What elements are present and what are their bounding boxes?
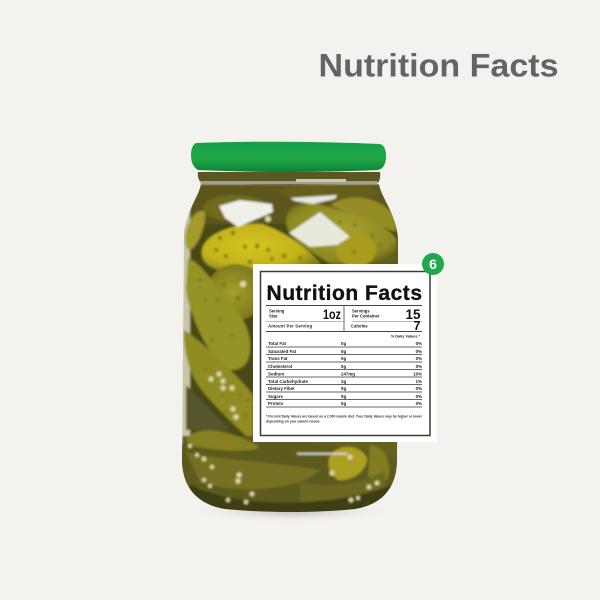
nutrient table xyxy=(268,341,422,406)
nutrient table: 0g xyxy=(341,341,346,346)
nutrient table: 0% xyxy=(416,356,422,361)
nutrient table: Total Carbohydrate xyxy=(268,379,308,384)
green lid xyxy=(191,142,386,172)
jar body contents xyxy=(180,184,400,514)
dark gap xyxy=(186,385,230,430)
nutrient table: Saturated Fat xyxy=(268,349,297,354)
nutrient table: 0% xyxy=(416,349,422,354)
serving size: 15 xyxy=(405,307,421,322)
nutrient table: 2g xyxy=(341,379,346,384)
serving size: Per Container xyxy=(352,314,380,318)
serving size: Serving xyxy=(269,308,285,314)
nutrient table: 0g xyxy=(341,356,346,361)
nutrient table: Total Fat xyxy=(268,341,287,346)
serving size: Amount Per Serving xyxy=(268,324,312,328)
label card xyxy=(253,264,437,442)
nutrient table: Sodium xyxy=(268,372,284,376)
label border xyxy=(260,272,430,436)
nutrient table: 0g xyxy=(341,401,346,406)
nutrient table: Protein xyxy=(268,401,283,406)
nutrient table: Cholesterol xyxy=(268,364,292,369)
nutrient table: 0% xyxy=(416,394,422,399)
number badge xyxy=(422,253,444,275)
nutrient table: 0g xyxy=(341,394,346,399)
glass edge xyxy=(180,184,190,444)
serving size: 7 xyxy=(414,319,421,333)
nutrition label xyxy=(253,264,437,442)
main heading: Nutrition Facts xyxy=(318,48,558,84)
serving size: % Daily Values * xyxy=(391,334,421,338)
nutrient table: Sugars xyxy=(268,394,283,399)
nutrient table: 0% xyxy=(416,386,422,391)
serving size: Calories xyxy=(351,324,368,328)
yellow pickle xyxy=(202,224,321,272)
nutrient table: 1% xyxy=(416,379,422,384)
lower long pickle xyxy=(184,330,253,442)
nutrient table: 0% xyxy=(416,341,422,346)
jar neck xyxy=(198,172,380,184)
footnote: depending on you calorie needs. xyxy=(266,420,320,424)
glass highlights xyxy=(219,200,273,227)
serving size: Size xyxy=(269,314,278,318)
pickle bumps xyxy=(198,220,390,417)
middle pickle xyxy=(210,263,253,320)
serving size: Servings xyxy=(352,308,370,314)
long pickle xyxy=(186,258,250,370)
bottom contents xyxy=(182,434,397,503)
low highlight xyxy=(297,453,347,454)
nutrient table: 0% xyxy=(416,401,422,406)
nutrient table: Dietary Fiber xyxy=(268,386,295,391)
upper right pickles xyxy=(330,197,396,232)
serving size: 1oz xyxy=(323,307,341,322)
nutrient table: 0g xyxy=(341,349,346,354)
nutrient table: 0g xyxy=(341,364,346,369)
mustard seeds xyxy=(188,216,379,504)
pickle jar photo xyxy=(180,142,400,514)
number badge: 6 xyxy=(429,256,437,272)
serving size xyxy=(268,307,421,338)
nutrient table: 247mg xyxy=(341,372,355,376)
label title: Nutrition Facts xyxy=(266,282,422,305)
jar shadow xyxy=(187,502,397,520)
footnote xyxy=(266,414,423,424)
nutrient table: Trans Fat xyxy=(268,356,288,361)
nutrient table: 10% xyxy=(413,372,422,376)
footnote: * Percent Daily Values are based on a 2,000 calorie diet. Your Daily Values may be higher or lower xyxy=(266,414,423,418)
nutrient table: 0% xyxy=(416,364,422,369)
nutrient table: 0g xyxy=(341,386,346,391)
infographic canvas xyxy=(182,53,558,518)
